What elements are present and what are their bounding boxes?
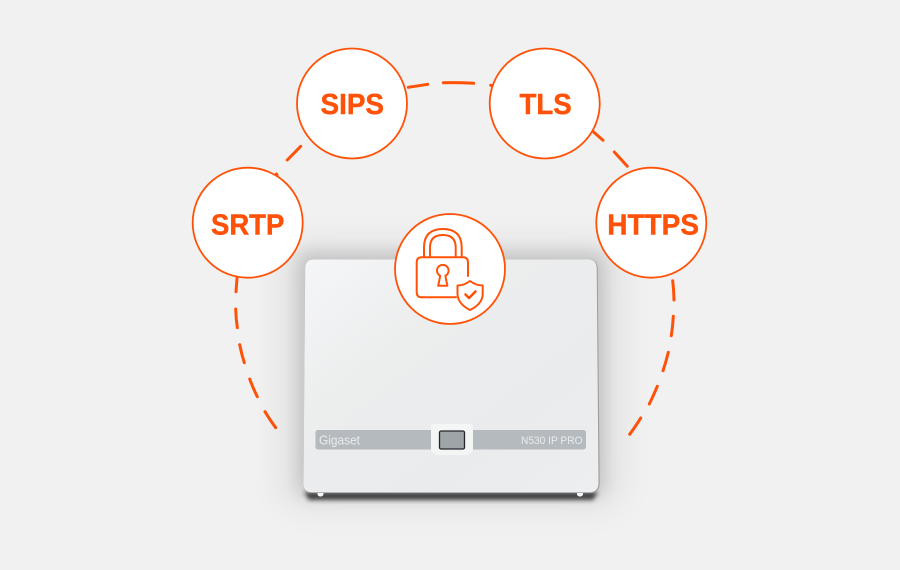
button [440,431,464,449]
icon: padlock [417,229,468,297]
device edge [304,260,600,493]
badge: SRTP: SRTP [211,209,284,241]
badge: TLS [490,48,600,158]
model label: N530 IP PRO [521,435,583,447]
device feet [318,491,583,496]
dashed connecting arc [236,83,674,434]
name strip [316,430,586,450]
badge: padlock with shield [395,214,505,324]
device body [304,260,598,492]
brand label: Gigaset [319,434,360,448]
badge: TLS: TLS [520,89,572,121]
badge: SIPS: SIPS [320,89,384,121]
button surround [431,424,473,455]
badge: SRTP [193,168,303,278]
device shadow [282,244,620,506]
icon: shield check [458,281,483,310]
badge: HTTPS [596,168,706,278]
badge: SIPS [297,48,407,158]
router device [282,244,620,506]
badge: HTTPS: HTTPS [607,209,699,241]
